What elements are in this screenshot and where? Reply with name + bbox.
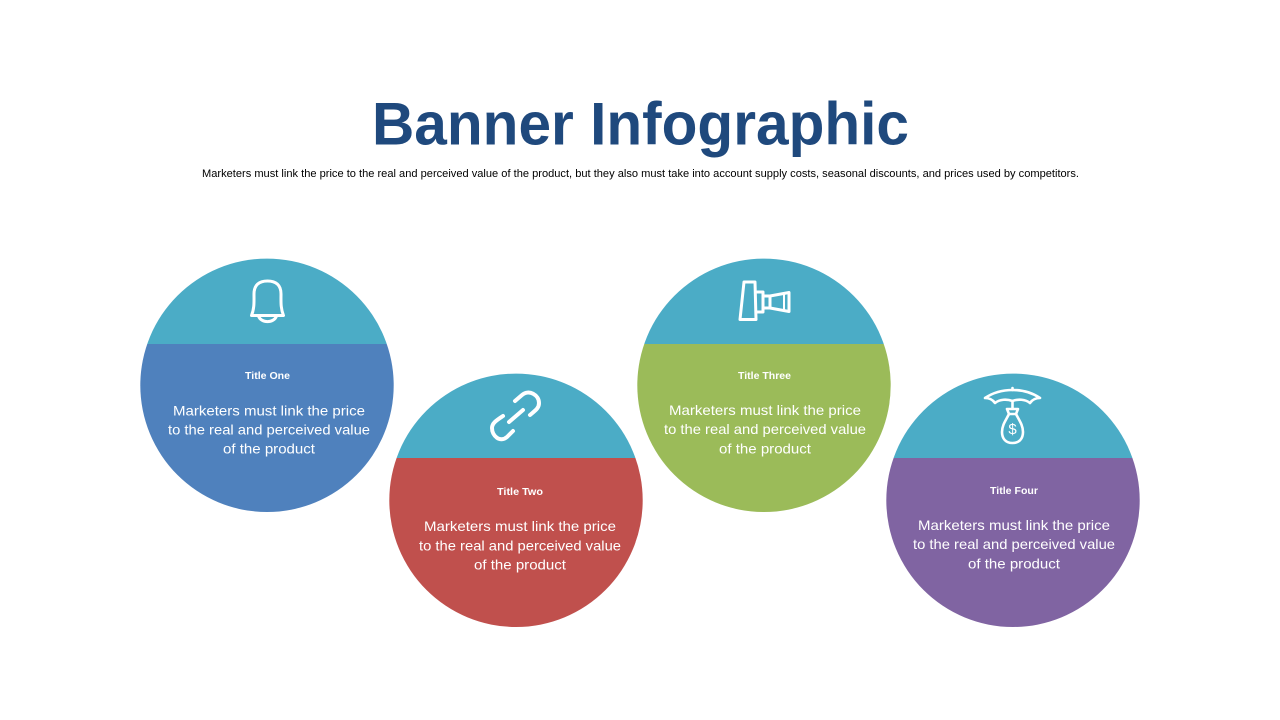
heading: title four: Title Four — [990, 485, 1038, 497]
text block: title one description — [168, 402, 370, 456]
circle cap: teal — [637, 258, 891, 344]
text block: title two description: Marketers must link the price — [424, 518, 616, 534]
icon: spyglass — [740, 282, 789, 320]
circle cap: teal — [886, 373, 1140, 458]
panel: title four circle — [886, 373, 1140, 628]
text block: title four description — [913, 517, 1115, 572]
panel: title one circle — [140, 258, 394, 512]
heading: title three: Title Three — [738, 370, 791, 382]
text block: title one description: Marketers must link the price — [173, 402, 365, 418]
title: Banner Infographic — [372, 90, 909, 158]
circle cap: teal — [389, 373, 643, 458]
circle body: red — [389, 458, 643, 628]
text block: title two description: of the product — [474, 556, 566, 572]
circle body: purple — [886, 458, 1140, 628]
circle body: blue — [140, 344, 394, 512]
panel: title three circle — [637, 258, 891, 512]
heading: title one: Title One — [245, 370, 290, 382]
text block: title one description: of the product — [223, 440, 315, 456]
icon: bell — [252, 281, 284, 322]
text block: title three description — [664, 402, 866, 456]
text block: title four description: of the product — [968, 556, 1060, 572]
text block: title two description — [419, 518, 621, 572]
panel: title two circle — [389, 373, 643, 628]
dollar sign: $ — [1008, 421, 1017, 438]
text block: title one description: to the real and perceived value — [168, 422, 370, 438]
text block: title three description: of the product — [719, 440, 811, 456]
subtitle text: Marketers must link the price to the real and perceived value of the product, but they also must take into account supply costs, seasonal discounts, and prices used by competitors. — [202, 168, 1079, 180]
text block: title two description: to the real and perceived value — [419, 538, 621, 554]
text block: title three description: Marketers must link the price — [669, 402, 861, 418]
icon: umbrella over money bag — [985, 388, 1040, 443]
icon: chain link — [492, 393, 539, 439]
text block: title four description: to the real and perceived value — [913, 536, 1115, 552]
circle body: green — [637, 344, 891, 512]
text block: title three description: to the real and perceived value — [664, 421, 866, 437]
circle cap: teal — [140, 258, 394, 344]
text block: title four description: Marketers must link the price — [918, 517, 1110, 533]
heading: title two: Title Two — [497, 486, 543, 498]
